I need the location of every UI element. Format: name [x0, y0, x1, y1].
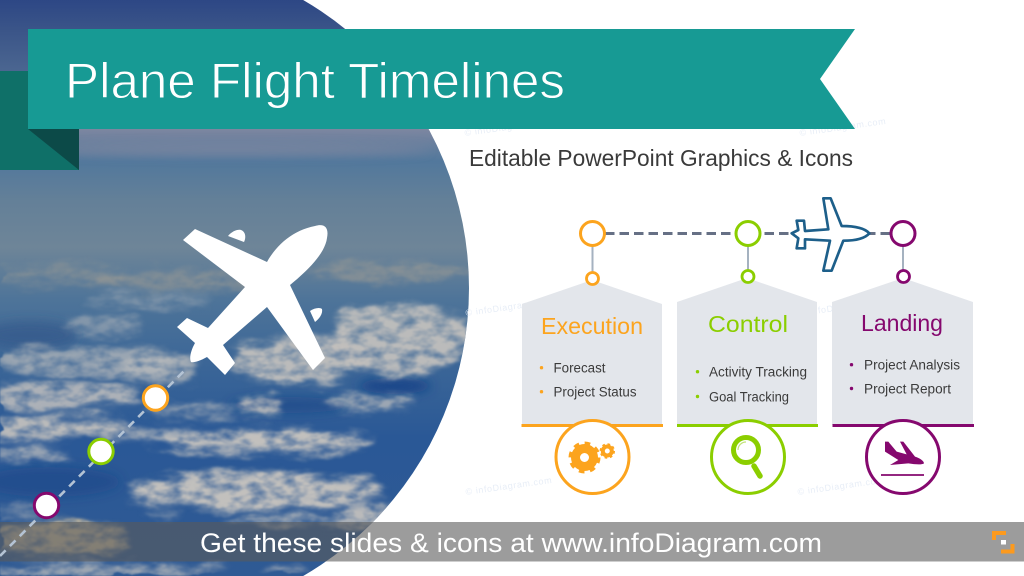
icon: magnifier	[712, 420, 784, 494]
list: Activity Tracking	[709, 364, 807, 380]
list: Project Analysis	[864, 358, 960, 372]
icon: gears	[556, 420, 629, 494]
node	[736, 222, 760, 246]
engine pods	[228, 230, 245, 242]
title: Plane Flight Timelines	[65, 53, 565, 109]
footer text: Get these slides & icons at www.infoDiagram.com	[200, 528, 822, 558]
icon: outlined plane on timeline	[792, 198, 869, 271]
list: Project Report	[864, 382, 951, 396]
watermarks: © infoDiagram.com	[464, 116, 552, 138]
watermarks	[464, 116, 887, 497]
watermarks: © infoDiagram.com	[799, 296, 887, 318]
list: Project Status	[554, 384, 637, 400]
background photo: sky and clouds in a circle	[0, 0, 480, 576]
node	[891, 222, 915, 246]
list: Forecast	[554, 360, 606, 376]
watermarks: © infoDiagram.com	[465, 296, 553, 318]
timeline dashed line	[605, 232, 892, 235]
marker: orange	[143, 386, 168, 410]
footer logo	[992, 531, 1014, 554]
diagonal flight path	[0, 370, 185, 556]
footer band	[0, 522, 1024, 562]
list: Goal Tracking	[709, 390, 789, 404]
list	[850, 358, 960, 396]
watermarks: © infoDiagram.com	[797, 475, 885, 497]
panel: control	[677, 222, 818, 494]
heading: Control	[708, 311, 788, 337]
panel: landing	[832, 222, 974, 494]
heading: Execution	[541, 313, 643, 339]
watermarks: © infoDiagram.com	[465, 475, 553, 497]
panel: execution	[522, 222, 663, 494]
ribbon banner	[28, 29, 855, 129]
title ribbon	[0, 29, 855, 170]
icon: landing plane	[866, 420, 940, 494]
ribbon fold	[0, 71, 79, 170]
marker: green	[89, 439, 113, 464]
node	[580, 222, 604, 246]
list	[696, 364, 807, 404]
subtitle: Editable PowerPoint Graphics & Icons	[469, 145, 853, 171]
watermarks: © infoDiagram.com	[799, 116, 887, 138]
list	[540, 360, 637, 400]
heading: Landing	[861, 310, 943, 336]
marker: purple	[34, 493, 59, 518]
large white plane	[177, 225, 328, 375]
